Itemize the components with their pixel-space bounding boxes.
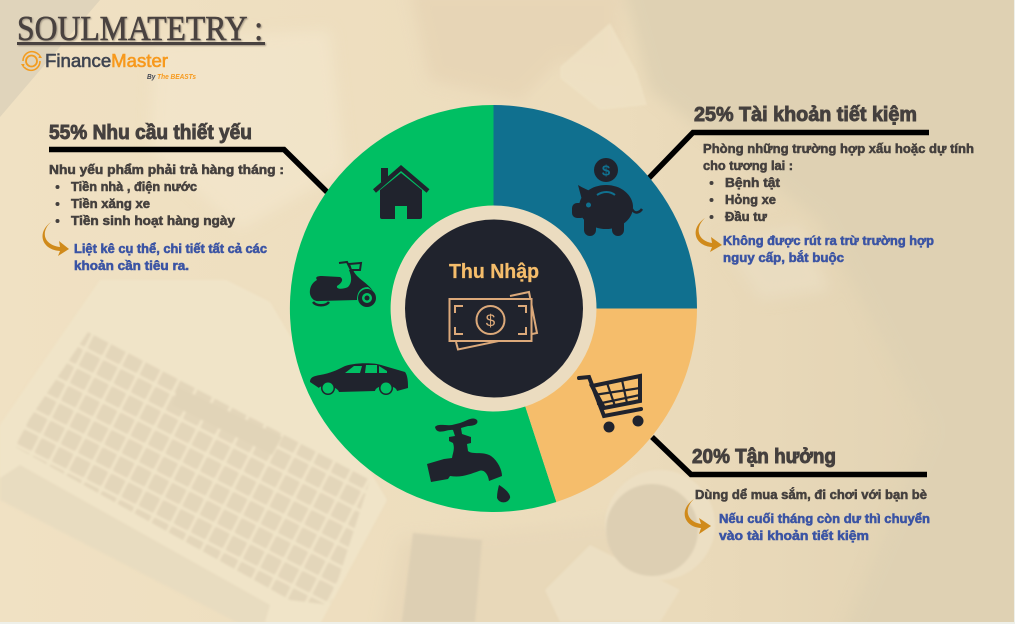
icon: shopping cart (579, 376, 644, 432)
text block: 20% intro: Dùng dể mua sắm, đi chơi với bạn bè (695, 487, 927, 502)
panel: 20% enjoyment (652, 437, 930, 543)
bill and cup (545, 545, 680, 622)
arrow: 20% (685, 499, 711, 534)
list: 55% items (56, 179, 236, 228)
logo byline: By The BEASTs (147, 74, 196, 81)
donut chart: income allocation (290, 105, 697, 512)
text block: 25% intro: Phòng những trường hợp xấu hoặc dự tính (703, 141, 974, 156)
logo: FinanceMaster (21, 51, 196, 81)
segment: 25% teal (494, 105, 697, 308)
heading: 20%: 20% Tận hưởng (692, 446, 836, 468)
list: 55% items: Tiền sinh hoạt hàng ngày (71, 213, 236, 228)
laptop body (0, 280, 387, 624)
icon: piggy bank (572, 158, 642, 236)
callout: 55% (74, 241, 267, 273)
icon: car (310, 363, 408, 395)
text block: 55% intro: Nhu yếu phẩm phải trả hàng tháng : (49, 162, 284, 177)
callout: 25%: nguy cấp, bắt buộc (723, 250, 844, 265)
callout: 20% (719, 511, 930, 543)
icon: banknotes (450, 292, 537, 350)
text block: 25% intro: cho tương lai : (703, 158, 793, 173)
title: SOULMATETRY : (17, 9, 263, 48)
callout: 20%: Nếu cuối tháng còn dư thì chuyển (719, 511, 930, 526)
segment: 55% green (290, 105, 556, 512)
heading: 55%: 55% Nhu cầu thiết yếu (49, 122, 252, 144)
list: 55% items: Tiền nhà , điện nước (71, 179, 197, 194)
leader line: 25% (649, 132, 929, 178)
callout: 55%: khoản cần tiêu ra. (74, 258, 189, 273)
list: 25% items (710, 175, 781, 224)
icon: piggy bank: $ (602, 162, 611, 180)
leader line: 55% (49, 150, 327, 192)
heading: 25%: 25% Tài khoản tiết kiệm (694, 104, 917, 126)
center ring (392, 206, 596, 410)
icon: water tap (427, 418, 510, 502)
callout: 25%: Không được rút ra trừ trường hợp (723, 233, 934, 248)
callout: 20%: vào tài khoản tiết kiệm (719, 528, 869, 543)
callout: 55%: Liệt kê cụ thể, chi tiết tất cả các (74, 241, 267, 256)
icon: logo coin (21, 52, 42, 70)
icon: scooter (310, 262, 374, 305)
callout: 25% (723, 233, 934, 265)
center disc (405, 220, 583, 398)
center label: Thu Nhập (449, 261, 539, 283)
list: 25% items: Hỏng xe (725, 192, 776, 207)
segment: 20% tan (525, 308, 697, 502)
list: 25% items: Bệnh tật (725, 175, 781, 190)
leader line: 20% (652, 437, 927, 474)
panel: 25% savings (649, 104, 974, 265)
list: 25% items: Đầu tư (725, 209, 768, 224)
arrow: 55% (42, 222, 69, 256)
logo wordmark: FinanceMaster (45, 51, 168, 71)
text block: 25% intro (703, 141, 974, 173)
panel: 55% essentials (42, 122, 327, 273)
arrow: 25% (696, 218, 722, 252)
icon: house (374, 168, 428, 219)
icon: banknotes: $ (486, 311, 496, 330)
list: 55% items: Tiền xăng xe (71, 196, 150, 211)
